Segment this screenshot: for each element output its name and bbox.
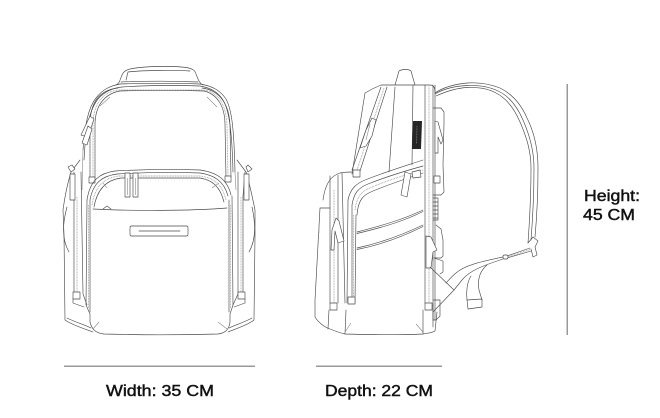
width dimension rule bbox=[64, 366, 255, 367]
height label: Height: bbox=[584, 188, 640, 205]
main compartment with zipper bbox=[82, 83, 236, 190]
pocket seams bbox=[357, 210, 423, 250]
brand label bbox=[412, 121, 422, 149]
right side pocket bbox=[228, 160, 255, 332]
pocket zipper pulls bbox=[125, 173, 138, 197]
lower strap wings and triangle bbox=[430, 257, 503, 312]
shoulder strap bbox=[435, 83, 538, 243]
main zipper pulls bbox=[81, 116, 94, 160]
height dimension rule bbox=[566, 84, 568, 335]
side view of backpack bbox=[315, 70, 538, 335]
logo label bbox=[130, 226, 188, 236]
depth dimension rule bbox=[316, 366, 442, 367]
front pocket bbox=[86, 169, 233, 335]
upper body zipper pull bbox=[360, 118, 376, 148]
top handle tube bbox=[395, 70, 415, 85]
depth label: Depth: 22 CM bbox=[325, 383, 433, 400]
width label: Width: 35 CM bbox=[106, 383, 214, 400]
height value: 45 CM bbox=[583, 207, 635, 224]
back padding bbox=[433, 108, 444, 320]
strap buckle and webbing bbox=[503, 237, 538, 259]
front view of backpack bbox=[63, 66, 255, 335]
left side pocket bbox=[63, 160, 93, 332]
top handle bbox=[116, 66, 203, 85]
front pocket curved zippers bbox=[347, 160, 423, 304]
upper body bbox=[352, 85, 435, 177]
front zipper pull bbox=[331, 218, 344, 250]
back strip with zipper bbox=[423, 85, 437, 334]
lower body bbox=[315, 172, 437, 335]
